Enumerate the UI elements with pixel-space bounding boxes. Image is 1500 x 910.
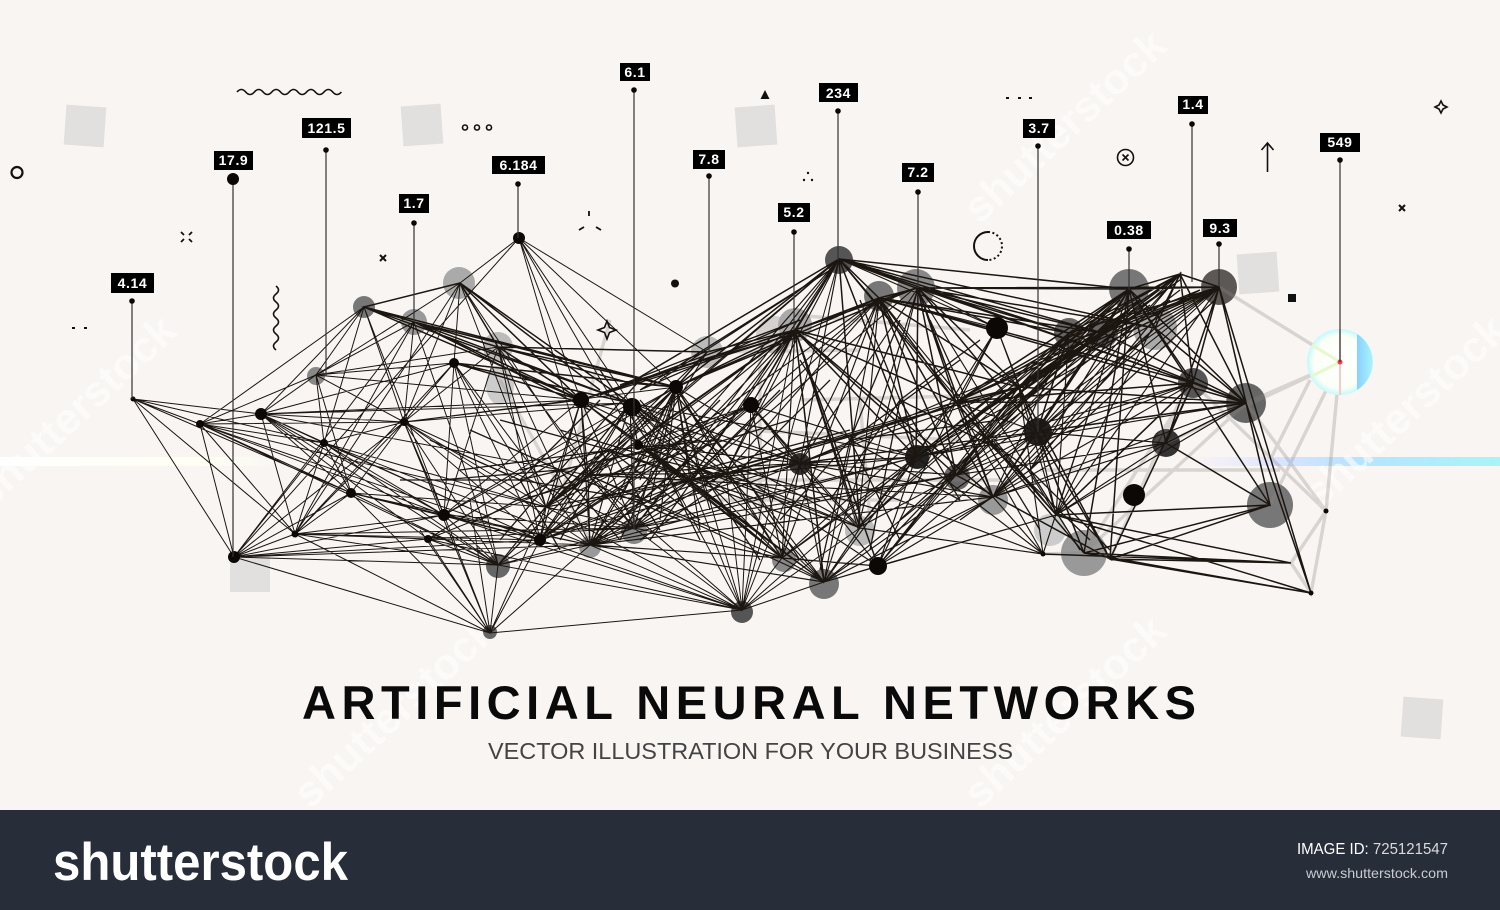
pin dots <box>129 87 1343 304</box>
footer url: www.shutterstock.com <box>1305 865 1448 881</box>
value label 9.3 <box>1203 219 1237 237</box>
light band left <box>0 457 290 466</box>
prism circle <box>1307 329 1373 395</box>
value label 234: 234 <box>826 85 851 101</box>
footer logo: shutterstock <box>53 833 348 892</box>
value label 5.2 <box>778 203 810 222</box>
value label 6.184 <box>492 156 545 174</box>
value label 9.3: 9.3 <box>1209 220 1231 236</box>
value label 4.14 <box>111 273 154 293</box>
decorative glyphs <box>12 90 1447 350</box>
value label 6.1 <box>620 63 650 81</box>
network: dense links centre <box>428 259 1246 582</box>
value label 4.14: 4.14 <box>118 275 147 291</box>
title: ARTIFICIAL NEURAL NETWORKS <box>302 676 1196 729</box>
value label 1.4 <box>1178 96 1208 114</box>
image id: IMAGE ID: 725121547 <box>1297 841 1448 858</box>
value label 121.5 <box>302 118 351 138</box>
footer bar <box>0 810 1500 910</box>
network: faded background links <box>500 287 1340 593</box>
value label 0.38 <box>1107 221 1151 239</box>
value label 7.2 <box>902 163 934 182</box>
light band right <box>1180 457 1500 466</box>
network: thin links left <box>133 238 916 633</box>
watermark: shutterstock <box>954 21 1176 232</box>
value label 3.7: 3.7 <box>1028 120 1050 136</box>
network: soft node halos <box>307 246 1293 639</box>
value label 3.7 <box>1023 119 1055 138</box>
value label 549 <box>1320 133 1360 152</box>
network: heavy links top <box>364 259 1311 593</box>
value label 1.4: 1.4 <box>1182 96 1204 112</box>
value label 7.2: 7.2 <box>907 164 929 180</box>
value label 6.1: 6.1 <box>624 64 646 80</box>
value label 0.38: 0.38 <box>1114 222 1144 238</box>
watermark: shutterstock <box>954 606 1176 817</box>
network: solid nodes <box>130 232 1328 596</box>
value label 5.2: 5.2 <box>783 204 805 220</box>
decorative solids <box>671 90 1296 302</box>
subtitle: VECTOR ILLUSTRATION FOR YOUR BUSINESS <box>488 738 1013 764</box>
value label 17.9 <box>214 151 253 170</box>
value label 6.184: 6.184 <box>499 157 538 173</box>
watermark: shutterstock <box>284 606 506 817</box>
value label 121.5: 121.5 <box>307 120 346 136</box>
data pins <box>132 90 1340 557</box>
value label 1.7 <box>399 194 429 213</box>
value label 7.8: 7.8 <box>698 151 720 167</box>
value label 17.9: 17.9 <box>219 152 248 168</box>
value label 7.8 <box>693 150 725 169</box>
value label 549: 549 <box>1327 134 1353 150</box>
value label 1.7: 1.7 <box>403 195 425 211</box>
value label 234 <box>819 83 858 102</box>
network: extra density links centre <box>400 270 1215 570</box>
